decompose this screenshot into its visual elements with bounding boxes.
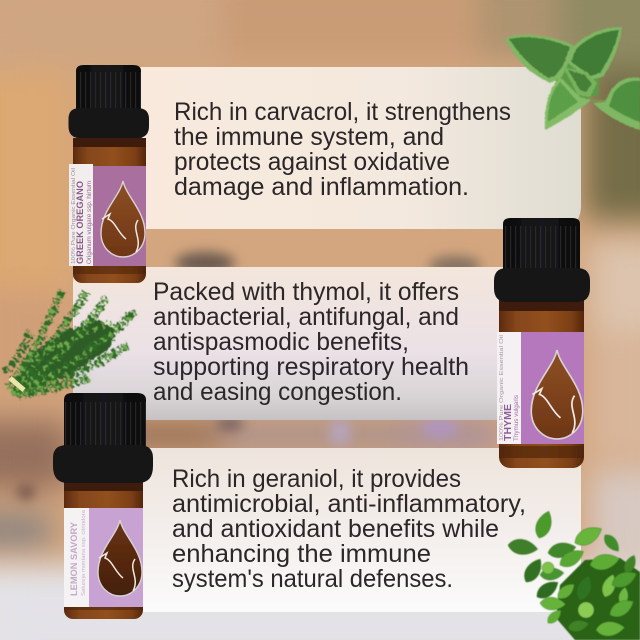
text: thyme benefits: and easing congestion.: [153, 378, 402, 406]
text: Greek oregano benefits: [174, 98, 511, 201]
icon: thyme bundle: [4, 290, 136, 395]
text: thyme benefits: supporting respiratory health: [153, 353, 469, 381]
text: lemon savory benefits: system's natural defenses.: [172, 565, 453, 593]
icon: lemon savory plant: [507, 509, 640, 640]
text: lemon savory benefits: enhancing the immune: [172, 540, 431, 568]
icon: oregano sprig: [505, 27, 640, 130]
bottle: thyme: THYME: [503, 404, 514, 441]
bottle: thyme: 100% Pure Organic Essential Oil: [499, 335, 505, 441]
background smudges: [17, 252, 481, 499]
bottle: lemon savory: Satureja montana ssp. citriodora: [81, 509, 87, 596]
bottle: Greek oregano: [68, 65, 149, 283]
panel: Greek oregano: [130, 67, 581, 229]
text: Greek oregano benefits: damage and inflammation.: [174, 173, 469, 201]
text: Greek oregano benefits: the immune system, and: [174, 123, 444, 151]
bottle: thyme: [494, 218, 590, 468]
text: thyme benefits: Packed with thymol, it offers: [153, 278, 459, 306]
text: thyme benefits: antibacterial, antifungal, and: [153, 303, 459, 331]
bottle: lemon savory: LEMON SAVORY: [69, 522, 79, 596]
text: thyme benefits: antispasmodic benefits,: [153, 328, 409, 356]
text: Greek oregano benefits: protects against oxidative: [174, 148, 450, 176]
panel: thyme: [73, 267, 510, 420]
text: Greek oregano benefits: Rich in carvacrol, it strengthens: [174, 98, 511, 126]
bottle: Greek oregano: GREEK OREGANO: [75, 181, 85, 264]
text: lemon savory benefits: [172, 465, 526, 593]
bottle: thyme: Thymus vulgaris: [513, 394, 520, 441]
text: thyme benefits: [153, 278, 469, 406]
panel: lemon savory: [130, 448, 581, 612]
bottle: lemon savory: [53, 393, 153, 619]
bottle: Greek oregano: Origanum vulgare ssp. hirtum: [87, 181, 93, 264]
icon: thyme bundle tie: [10, 378, 24, 390]
bottle: Greek oregano: 100% Pure Organic Essential Oil: [71, 168, 77, 264]
text: lemon savory benefits: antimicrobial, anti-inflammatory,: [172, 490, 526, 518]
text: lemon savory benefits: and antioxidant benefits while: [172, 515, 499, 543]
text: lemon savory benefits: Rich in geraniol, it provides: [172, 465, 461, 493]
